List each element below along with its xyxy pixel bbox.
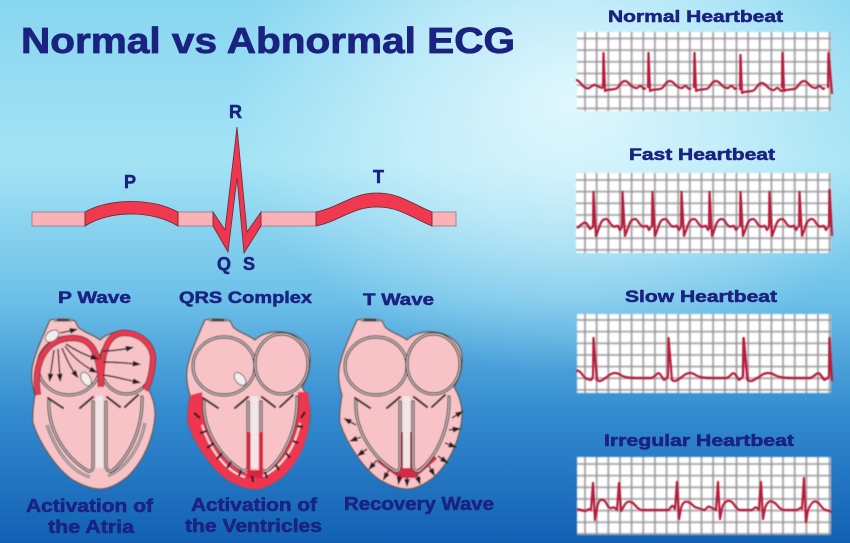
heading: QRS Complex: QRS Complex: [179, 288, 313, 307]
heading: Normal Heartbeat: Normal Heartbeat: [608, 7, 783, 26]
heading: T Wave: T Wave: [363, 290, 434, 309]
wave label P: P: [124, 172, 136, 192]
heart: ventricle activation: [187, 319, 310, 489]
heading: Slow Heartbeat: Slow Heartbeat: [625, 287, 777, 306]
AV node: [232, 370, 248, 388]
activation ticks: [194, 412, 305, 482]
red ventricular walls: [188, 392, 310, 489]
P wave segment: [85, 202, 178, 226]
caption: Activation of the Atria: the Atria: [48, 517, 135, 537]
AV node: [78, 370, 94, 388]
strip: fast heartbeat: [576, 173, 832, 253]
irregular trace: [577, 478, 832, 522]
baseline segments: [32, 212, 456, 226]
caption: Activation of the Ventricles: [185, 495, 322, 536]
ECG waveform diagram: [32, 102, 456, 274]
red atrial arcs: [37, 333, 153, 395]
caption: Activation of the Atria: [26, 496, 154, 537]
wave label R: R: [229, 102, 242, 122]
strip: irregular heartbeat: [577, 457, 832, 535]
wave label S: S: [243, 254, 255, 274]
strip: slow heartbeat: [576, 314, 832, 393]
QRS segment: [213, 127, 261, 253]
heading: P Wave: P Wave: [58, 288, 131, 307]
heart: recovery wave: [339, 319, 462, 489]
caption: Activation of the Atria: Activation of: [26, 496, 154, 516]
septum activation: [247, 432, 263, 478]
caption: Activation of the Ventricles: Activation of: [191, 495, 318, 515]
wave label T: T: [373, 167, 384, 187]
wave label Q: Q: [217, 254, 231, 274]
heart: atria activation: [32, 319, 155, 489]
strip: normal heartbeat: [576, 32, 832, 111]
caption: Recovery Wave: Recovery Wave: [344, 494, 494, 514]
heading: Irregular Heartbeat: Irregular Heartbeat: [604, 431, 794, 450]
caption: Activation of the Ventricles: the Ventricles: [185, 516, 322, 536]
heading: Fast Heartbeat: Fast Heartbeat: [629, 145, 775, 164]
conduction arrows: [50, 330, 137, 382]
sinus node: [43, 328, 61, 344]
T wave segment: [316, 193, 432, 226]
normal trace: [576, 53, 832, 94]
red septum remainder: [377, 432, 437, 478]
slow trace: [576, 338, 832, 381]
title: Normal vs Abnormal ECG: [21, 20, 515, 61]
fast trace: [577, 190, 832, 236]
recovery ticks: [347, 413, 460, 483]
